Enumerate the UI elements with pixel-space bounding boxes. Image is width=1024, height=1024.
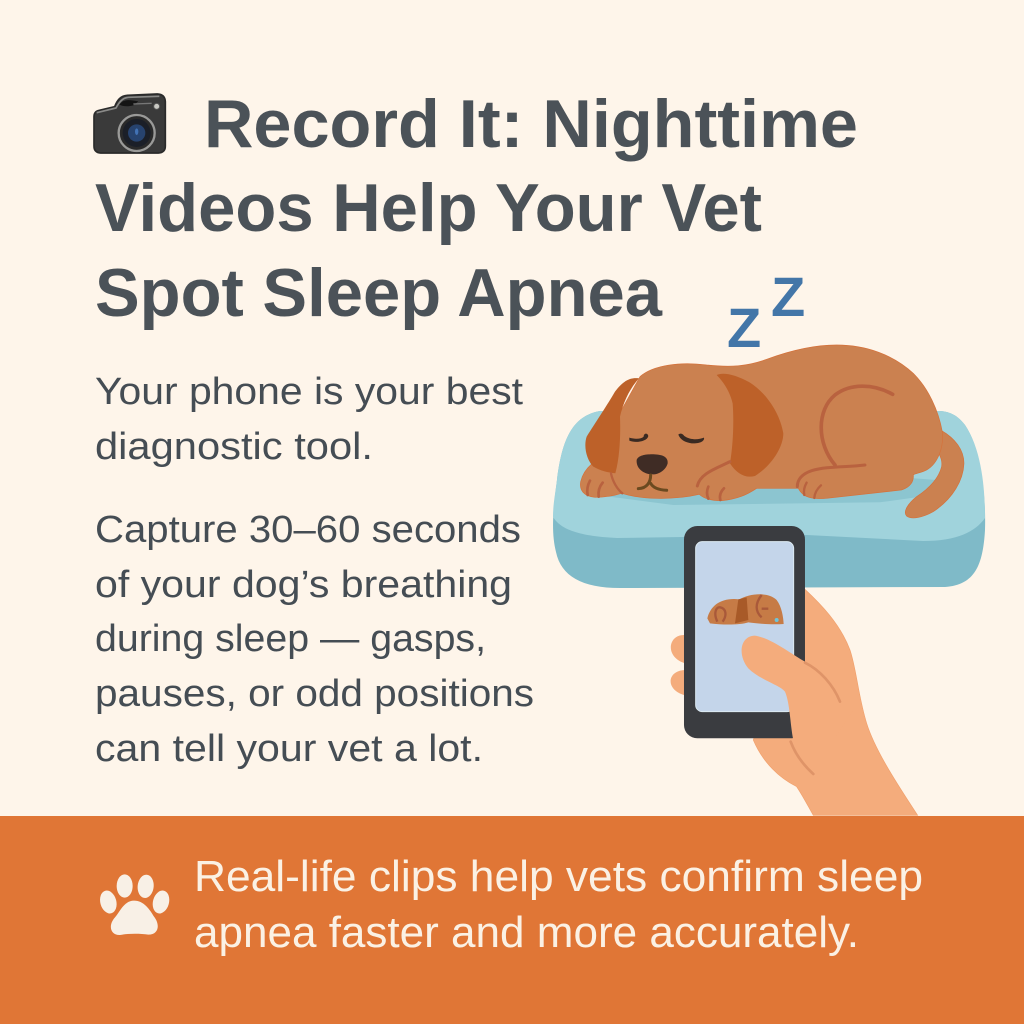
dog markings (587, 386, 893, 500)
phone (684, 526, 805, 738)
hand creases (791, 663, 840, 774)
text block: instructions: Capture 30–60 seconds (95, 509, 521, 551)
banner (0, 816, 1024, 1024)
fingers (671, 635, 685, 695)
phone screen (696, 542, 794, 712)
title: Record It: Nighttime (204, 86, 858, 162)
icon: sleeping Z letters (727, 265, 805, 359)
icon: camera (94, 94, 165, 153)
dog tail (905, 431, 964, 518)
dog nose (637, 454, 668, 474)
palm and wrist (753, 589, 918, 815)
icon: sleeping Z letters: Z (727, 296, 761, 359)
banner text: Real-life clips help vets confirm sleep (194, 852, 923, 901)
text block: instructions (95, 509, 534, 770)
thumb (742, 636, 853, 750)
dog on phone screen (707, 594, 784, 624)
dog body (580, 345, 943, 501)
icon: paw print (98, 874, 172, 935)
dog left ear (585, 378, 639, 473)
text block: intro: diagnostic tool. (95, 426, 373, 468)
title (95, 86, 858, 331)
text block: instructions: during sleep — gasps, (95, 618, 486, 660)
dog closed eyes (629, 434, 704, 443)
dog right ear (717, 374, 783, 477)
banner text: apnea faster and more accurately. (194, 908, 859, 957)
text block: instructions: pauses, or odd positions (95, 673, 534, 715)
illustration: hand holding phone (671, 526, 918, 815)
dog mouth (638, 475, 667, 490)
title: Videos Help Your Vet (95, 170, 762, 246)
text block: instructions: of your dog’s breathing (95, 564, 512, 606)
text block: instructions: can tell your vet a lot. (95, 728, 483, 770)
icon: sleeping Z letters: Z (771, 265, 805, 328)
icon: cushion (553, 411, 985, 588)
text block: intro: Your phone is your best (95, 371, 523, 413)
title: Spot Sleep Apnea (95, 255, 663, 331)
illustration: sleeping dog (580, 345, 964, 518)
banner text (194, 852, 923, 957)
text block: intro (95, 371, 523, 468)
